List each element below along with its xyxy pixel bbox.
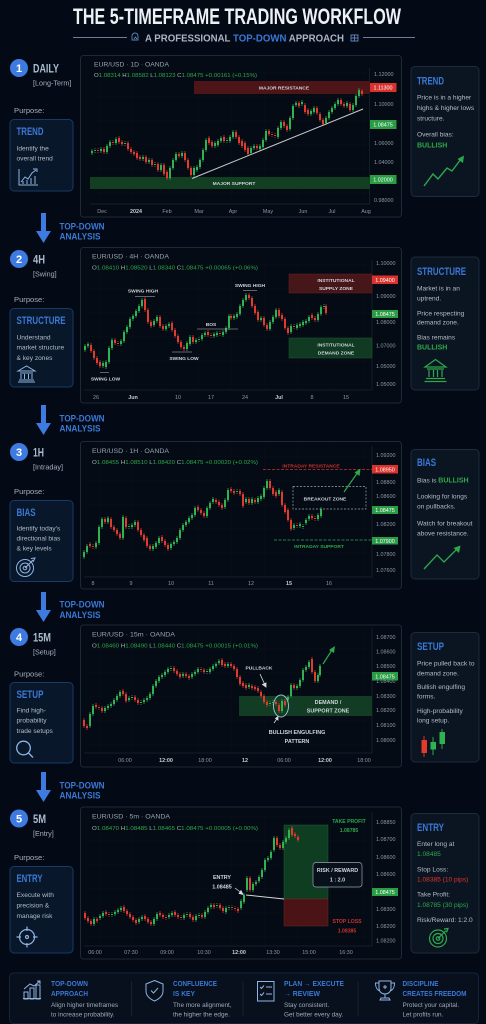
step 5 label: 5 bbox=[16, 814, 22, 826]
icon: checklist bbox=[258, 982, 274, 1001]
bullish engulfing annotation: PATTERN bbox=[285, 739, 309, 745]
chart header: EUR/USD · 1D · OANDA bbox=[94, 62, 170, 68]
step 1 label: 1 bbox=[16, 63, 22, 75]
step 2 label: Purpose: bbox=[14, 295, 44, 304]
side panel: entry: ENTRY bbox=[417, 822, 444, 834]
price axis: 1.08600 bbox=[376, 494, 396, 500]
intraday resistance bbox=[263, 464, 372, 470]
price axis: 1.04000 bbox=[374, 160, 394, 166]
date axis: 06:00 bbox=[88, 950, 102, 956]
arrow: top-down 4: ANALYSIS bbox=[60, 790, 100, 800]
takeaway: confluence: the higher the edge. bbox=[173, 1012, 230, 1018]
stop loss label bbox=[333, 919, 362, 934]
purpose card: entry bbox=[10, 866, 73, 953]
date axis bbox=[88, 950, 353, 956]
side panel: trend bbox=[411, 66, 479, 196]
demand zone: INSTITUTIONAL bbox=[317, 342, 355, 348]
date axis: 16 bbox=[326, 581, 332, 587]
price axis: 1.07000 bbox=[376, 344, 396, 350]
take profit label bbox=[332, 819, 367, 834]
step 5 label: Purpose: bbox=[14, 853, 44, 862]
takeaway: top-down approach: APPROACH bbox=[51, 989, 88, 998]
takeaway: confluence: IS KEY bbox=[173, 989, 195, 998]
step 3 label: Purpose: bbox=[14, 487, 44, 496]
swing labels: SWING HIGH bbox=[235, 283, 266, 289]
purpose card: structure bbox=[10, 308, 73, 387]
date axis: 8 bbox=[310, 395, 314, 401]
price axis: 1.08500 bbox=[376, 664, 396, 670]
price axis: 1.07900 bbox=[375, 539, 395, 545]
price axis: 1.08950 bbox=[375, 468, 395, 474]
chart header: EUR/USD · 5m · OANDA bbox=[92, 814, 171, 820]
side panel: entry: 1.08785 (30 pips) bbox=[417, 902, 468, 909]
chart 2: 4h bbox=[80, 248, 402, 403]
arrow: top-down 2 bbox=[36, 405, 104, 435]
price axis: 1.10000 bbox=[374, 102, 394, 108]
side panel: entry: 1.08485 bbox=[417, 851, 441, 858]
date axis: 10 bbox=[175, 395, 181, 401]
purpose card: trend: overall trend bbox=[16, 156, 53, 162]
entry annotation bbox=[212, 875, 284, 899]
side panel: structure bbox=[411, 257, 479, 390]
bullish engulfing annotation: BULLISH ENGULFING bbox=[269, 730, 325, 736]
step 4 label: Purpose: bbox=[14, 670, 44, 678]
arrow: top-down 3: ANALYSIS bbox=[60, 610, 100, 620]
date axis: 11 bbox=[208, 581, 214, 587]
date axis: Jun bbox=[128, 395, 138, 401]
step 4 label: 4 bbox=[16, 632, 23, 644]
risk reward box: RISK / REWARD bbox=[317, 868, 358, 874]
date axis: 06:00 bbox=[118, 758, 132, 764]
chart 3: 1h bbox=[80, 442, 402, 589]
date axis: 06:00 bbox=[277, 758, 291, 764]
takeaway: confluence: CONFLUENCE bbox=[173, 979, 217, 988]
step 3 label: 3 bbox=[16, 447, 22, 459]
trendline bbox=[192, 109, 363, 178]
pullback annotation bbox=[246, 666, 273, 687]
date axis: 24 bbox=[242, 395, 248, 401]
purpose card: entry: precision & bbox=[16, 902, 50, 910]
subtitle text: A PROFESSIONAL TOP-DOWN APPROACH bbox=[145, 32, 344, 44]
date axis: Jul bbox=[329, 209, 335, 215]
date axis: 15 bbox=[286, 581, 292, 587]
side panel: bias: Watch for breakout bbox=[417, 520, 473, 528]
step 2 label bbox=[10, 250, 57, 304]
demand zone: DEMAND ZONE bbox=[318, 350, 355, 356]
date axis: 13:30 bbox=[266, 950, 280, 956]
arrow: top-down 4 bbox=[36, 772, 104, 802]
side panel: structure: Price respecting bbox=[417, 310, 465, 318]
takeaway: discipline: Let profits run. bbox=[402, 1012, 444, 1018]
arrow: top-down 3: TOP-DOWN bbox=[60, 600, 104, 610]
icon: shield bbox=[146, 980, 163, 1001]
side panel: bias: on pullbacks. bbox=[417, 504, 456, 510]
date axis: Dec bbox=[97, 209, 107, 215]
side panel: trend: highs & higher lows bbox=[417, 105, 475, 112]
swing labels: SWING HIGH bbox=[128, 288, 159, 294]
purpose card: bias bbox=[10, 500, 73, 582]
step 5 label bbox=[10, 810, 54, 862]
icon: crosshair bbox=[16, 926, 38, 948]
purpose card: setup bbox=[10, 682, 73, 763]
takeaway: top-down approach: TOP-DOWN bbox=[51, 979, 88, 988]
major resistance zone bbox=[194, 81, 370, 94]
date axis: 12 bbox=[242, 758, 248, 764]
supply zone bbox=[289, 274, 372, 293]
takeaway: plan execute review bbox=[258, 979, 344, 1018]
side panel: trend: TREND bbox=[417, 76, 444, 88]
purpose card: setup: SETUP bbox=[16, 689, 44, 701]
date axis: 17 bbox=[208, 395, 214, 401]
side panel: setup: Price pulled back to bbox=[417, 660, 475, 668]
pullback annotation: PULLBACK bbox=[246, 666, 273, 672]
side panel: entry bbox=[411, 814, 479, 953]
step 4 label: [Setup] bbox=[33, 648, 56, 656]
price axis: 1.08475 bbox=[375, 674, 395, 680]
arrow: breakout bbox=[344, 468, 360, 492]
candlesticks bbox=[85, 293, 326, 369]
price axis: 1.08475 bbox=[375, 312, 395, 318]
date axis: 09:00 bbox=[160, 950, 174, 956]
purpose card: structure: STRUCTURE bbox=[16, 315, 66, 327]
bullish engulfing annotation bbox=[269, 695, 325, 745]
step 2 label: [Swing] bbox=[33, 270, 57, 278]
candlesticks bbox=[84, 657, 320, 730]
take profit zone bbox=[284, 825, 328, 899]
step 4 label bbox=[10, 628, 56, 678]
stop loss label: STOP LOSS bbox=[333, 919, 362, 925]
purpose card: setup: Find high- bbox=[16, 708, 46, 714]
side panel: setup bbox=[411, 632, 479, 762]
candlesticks bbox=[92, 88, 362, 180]
price axis: 1.02000 bbox=[373, 178, 393, 184]
price axis bbox=[372, 453, 398, 574]
price axis bbox=[372, 635, 398, 744]
ohlc values: O1.08470 H1.08485 L1.08465 C1.08475 +0.00005 (+0.00%) bbox=[92, 826, 258, 832]
side panel: setup: High-probability bbox=[417, 708, 464, 715]
swing labels: SWING LOW bbox=[169, 356, 199, 362]
step 5 label: 5M bbox=[33, 812, 46, 826]
date axis: Aug bbox=[361, 209, 371, 215]
icon: magnifier bbox=[17, 741, 33, 758]
step 1 label: DAILY bbox=[33, 62, 59, 76]
date axis: Apr bbox=[229, 209, 237, 215]
step 2 label: 4H bbox=[33, 252, 45, 266]
icon: rising arrow bbox=[424, 156, 464, 186]
major resistance zone: MAJOR RESISTANCE bbox=[259, 86, 310, 92]
side panel: setup: Bullish engulfing bbox=[417, 684, 465, 691]
date axis: May bbox=[263, 209, 273, 215]
stop loss label: 1.08385 bbox=[338, 928, 356, 934]
price axis bbox=[372, 820, 398, 944]
side panel: trend: Price is in a higher bbox=[417, 94, 472, 102]
price axis: 1.05000 bbox=[376, 364, 396, 370]
purpose card: trend bbox=[10, 120, 73, 191]
purpose card: structure: & key zones bbox=[16, 355, 53, 362]
price axis: 1.09400 bbox=[375, 278, 395, 284]
price axis: 1.08300 bbox=[376, 907, 396, 913]
demand support zone bbox=[239, 696, 372, 716]
date axis: 8 bbox=[92, 581, 94, 587]
side panel: bias: above resistance. bbox=[417, 530, 469, 538]
demand zone bbox=[289, 338, 372, 358]
risk reward box bbox=[313, 862, 362, 887]
price axis: 1.08600 bbox=[376, 855, 396, 861]
risk reward box: 1 : 2.0 bbox=[330, 878, 345, 884]
swing labels: SWING LOW bbox=[91, 376, 121, 382]
price axis: 1.08000 bbox=[376, 320, 396, 326]
price axis: 1.08400 bbox=[376, 679, 396, 685]
price axis: 1.08850 bbox=[376, 820, 396, 826]
price axis: 1.12000 bbox=[374, 72, 394, 78]
date axis: 12 bbox=[248, 581, 254, 587]
takeaway: plan execute review: → REVIEW bbox=[284, 989, 321, 998]
side panel: setup: long setup. bbox=[417, 718, 449, 724]
step 4 label: 15M bbox=[33, 630, 51, 644]
takeaway: top-down approach: Align higher timeframes bbox=[51, 1002, 118, 1009]
price axis: 1.08300 bbox=[376, 694, 396, 700]
side panel: trend: Overall bias: bbox=[417, 132, 454, 138]
arrow: top-down 1: ANALYSIS bbox=[60, 232, 100, 242]
icon: trend chart bbox=[19, 169, 38, 185]
icon: target bbox=[16, 558, 35, 576]
price axis: 1.08000 bbox=[376, 738, 396, 744]
date axis: 2024 bbox=[130, 209, 142, 215]
step 1 label: [Long-Term] bbox=[33, 78, 71, 88]
date axis bbox=[118, 758, 371, 764]
takeaway: top-down approach bbox=[23, 979, 118, 1018]
purpose card: entry: Execute with bbox=[16, 892, 54, 899]
date axis bbox=[93, 395, 349, 401]
bottom strip bbox=[10, 973, 478, 1024]
date axis: 10 bbox=[168, 581, 174, 587]
price axis: 1.11300 bbox=[373, 86, 393, 92]
date axis: 18:00 bbox=[357, 758, 371, 764]
purpose card: trend: Identify the bbox=[16, 146, 49, 152]
arrow: top-down 1: TOP-DOWN bbox=[60, 222, 104, 232]
arrow: top-down 2: ANALYSIS bbox=[60, 424, 100, 434]
price axis: 1.08200 bbox=[376, 708, 396, 714]
date axis: 16:30 bbox=[339, 950, 353, 956]
chart 5: 5m bbox=[80, 807, 402, 959]
price axis: 1.10000 bbox=[376, 261, 396, 267]
purpose card: bias: BIAS bbox=[16, 507, 36, 519]
side panel: setup: forms. bbox=[417, 694, 435, 700]
price axis: 1.09200 bbox=[376, 453, 396, 459]
intraday resistance: INTRADAY RESISTANCE bbox=[282, 464, 340, 470]
date axis: Feb bbox=[162, 209, 172, 215]
date axis: 15 bbox=[343, 395, 349, 401]
takeaway: confluence: The more alignment, bbox=[173, 1002, 232, 1009]
ohlc values: O1.08314 H1.08582 L1.08123 C1.08475 +0.00161 (+0.15%) bbox=[94, 73, 257, 79]
date axis bbox=[97, 209, 371, 215]
chart header: EUR/USD · 4H · OANDA bbox=[92, 254, 170, 260]
takeaway: discipline: DISCIPLINE bbox=[402, 979, 438, 988]
icon: target green bbox=[430, 928, 448, 947]
demand support zone: DEMAND / bbox=[315, 700, 342, 706]
side panel: entry: Take Profit: bbox=[417, 892, 450, 898]
step 1 label: Purpose: bbox=[14, 106, 44, 115]
arrow: top-down 2: TOP-DOWN bbox=[60, 414, 104, 424]
price axis: 1.07800 bbox=[376, 552, 396, 558]
date axis: 12:00 bbox=[159, 758, 173, 764]
purpose card: trend: TREND bbox=[16, 126, 44, 138]
candlesticks bbox=[85, 826, 298, 926]
date axis: 07:30 bbox=[124, 950, 138, 956]
price axis: 1.08475 bbox=[375, 508, 395, 514]
takeaway: top-down approach: to increase probability. bbox=[51, 1012, 115, 1018]
price axis: 1.08475 bbox=[375, 890, 395, 896]
chart header: EUR/USD · 1H · OANDA bbox=[92, 448, 170, 455]
date axis bbox=[92, 581, 332, 587]
side panel: entry: Risk/Reward: 1:2.0 bbox=[417, 917, 473, 924]
date axis: 12:00 bbox=[318, 758, 332, 764]
date axis: 26 bbox=[93, 395, 99, 401]
price axis: 1.08600 bbox=[376, 872, 396, 878]
ohlc values: O1.08410 H1.08520 L1.08340 C1.08475 +0.00065 (+0.06%) bbox=[92, 266, 258, 272]
arrow: top-down 4: TOP-DOWN bbox=[60, 780, 104, 790]
price axis: 1.08800 bbox=[376, 480, 396, 486]
side panel: entry: Enter long at bbox=[417, 841, 455, 848]
date axis: 12:00 bbox=[232, 950, 246, 956]
side panel: structure: Bias remains bbox=[417, 334, 456, 342]
step 3 label: 1H bbox=[33, 446, 44, 460]
icon: trophy bbox=[376, 981, 394, 1000]
price axis bbox=[372, 261, 398, 388]
chart 4: 15m bbox=[80, 625, 402, 767]
side panel: bias bbox=[411, 450, 479, 579]
side panel: structure: BULLISH bbox=[417, 344, 447, 352]
ohlc values: O1.08460 H1.08490 L1.08440 C1.08475 +0.00015 (+0.01%) bbox=[92, 644, 258, 650]
arrow: top-down 1 bbox=[36, 213, 104, 243]
date axis: 10:30 bbox=[197, 950, 211, 956]
takeaway: plan execute review: Stay consistent. bbox=[284, 1002, 329, 1009]
icon: rising arrow bbox=[424, 546, 460, 569]
entry annotation: ENTRY bbox=[213, 875, 231, 881]
intraday support: INTRADAY SUPPORT bbox=[294, 544, 344, 550]
purpose card: structure: market structure bbox=[16, 344, 64, 352]
price axis: 1.06000 bbox=[374, 141, 394, 147]
demand support zone: SUPPORT ZONE bbox=[307, 708, 350, 714]
purpose card: setup: trade setups bbox=[16, 728, 53, 735]
swing labels: BOS bbox=[206, 322, 217, 328]
takeaway: plan execute review: Get better every day. bbox=[284, 1012, 343, 1018]
side panel: entry: 1.08385 (10 pips) bbox=[417, 876, 468, 884]
side panel: trend: structure. bbox=[417, 116, 445, 122]
breakout zone bbox=[293, 486, 366, 509]
takeaway: discipline: CREATES FREEDOM bbox=[402, 989, 466, 998]
icon: candlesticks bbox=[422, 729, 445, 757]
purpose card: structure: Understand bbox=[16, 334, 51, 342]
step 2 label: 2 bbox=[16, 254, 22, 266]
takeaway: discipline bbox=[376, 979, 466, 1018]
candlesticks bbox=[84, 479, 321, 559]
price axis: 1.08200 bbox=[376, 924, 396, 930]
take profit label: TAKE PROFIT bbox=[332, 819, 367, 825]
price axis: 1.05000 bbox=[376, 382, 396, 388]
swing labels bbox=[91, 283, 266, 382]
date axis: 15:00 bbox=[302, 950, 316, 956]
breakout zone: BREAKOUT ZONE bbox=[304, 496, 347, 502]
price axis: 1.07600 bbox=[376, 568, 396, 574]
price axis: 1.08700 bbox=[376, 635, 396, 641]
intraday support bbox=[274, 540, 372, 550]
icon: bank green bbox=[424, 360, 446, 382]
ohlc values: O1.08455 H1.08510 L1.08420 C1.08475 +0.00020 (+0.02%) bbox=[92, 460, 258, 466]
price axis: 1.09000 bbox=[376, 294, 396, 300]
side panel: structure: Market is in an bbox=[417, 286, 460, 292]
side panel: bias: BIAS bbox=[417, 457, 436, 469]
chart header: EUR/USD · 15m · OANDA bbox=[92, 632, 176, 638]
step 3 label: [Intraday] bbox=[33, 462, 63, 472]
side panel: structure: demand zone. bbox=[417, 320, 459, 326]
purpose card: entry: ENTRY bbox=[16, 873, 43, 885]
arrow: top-down 3 bbox=[36, 592, 104, 622]
step 1 label bbox=[10, 59, 71, 115]
takeaway: plan execute review: PLAN → EXECUTE bbox=[284, 979, 344, 988]
side panel: setup: demand zone. bbox=[417, 670, 459, 678]
side panel: structure: STRUCTURE bbox=[417, 266, 466, 278]
price axis: 1.08700 bbox=[376, 837, 396, 843]
supply zone: INSTITUTIONAL bbox=[317, 278, 355, 284]
price axis: 1.08100 bbox=[376, 723, 396, 729]
side panel: setup: SETUP bbox=[417, 641, 444, 653]
side panel: bias: Bias is BULLISH bbox=[417, 478, 469, 484]
side panel: trend: BULLISH bbox=[417, 142, 447, 150]
takeaway: confluence bbox=[146, 979, 232, 1018]
purpose card: entry: manage risk bbox=[16, 913, 53, 920]
take profit label: 1.08785 bbox=[340, 828, 358, 834]
icon: bars and arrow bbox=[23, 981, 41, 999]
price axis bbox=[370, 72, 396, 204]
chart 1: daily bbox=[80, 56, 402, 217]
price axis: 1.08200 bbox=[376, 938, 396, 944]
date axis: Mar bbox=[194, 209, 204, 215]
price axis: 1.08475 bbox=[373, 122, 393, 128]
price axis: 1.08200 bbox=[376, 522, 396, 528]
icon: subtitle right bbox=[351, 35, 358, 41]
step 3 label bbox=[10, 443, 63, 496]
arrow: setup continuation bbox=[323, 646, 335, 664]
side panel: entry: Stop Loss: bbox=[417, 866, 448, 874]
entry annotation: 1.08485 bbox=[212, 884, 232, 890]
side panel: structure: uptrend. bbox=[417, 296, 441, 302]
icon: bank bbox=[18, 366, 35, 382]
price axis: 1.08600 bbox=[376, 650, 396, 656]
price axis: 0.98000 bbox=[374, 198, 394, 204]
purpose card: setup: probability bbox=[16, 718, 47, 724]
date axis: 18:00 bbox=[198, 758, 212, 764]
stop loss zone bbox=[284, 899, 328, 926]
icon: subtitle left bbox=[132, 33, 138, 40]
side panel: bias: Looking for longs bbox=[417, 494, 468, 500]
date axis: 9 bbox=[130, 581, 132, 587]
step 5 label: [Entry] bbox=[33, 829, 54, 838]
purpose card: bias: directional bias bbox=[16, 536, 61, 542]
major support zone bbox=[90, 177, 370, 189]
date axis: Jun bbox=[299, 209, 307, 215]
subtitle bbox=[73, 32, 415, 44]
supply zone: SUPPLY ZONE bbox=[319, 286, 354, 292]
purpose card: bias: Identify today's bbox=[16, 526, 61, 532]
major support zone: MAJOR SUPPORT bbox=[213, 181, 255, 187]
takeaway: discipline: Protect your capital. bbox=[402, 1002, 459, 1009]
date axis: Jul bbox=[275, 395, 283, 401]
purpose card: bias: & key levels bbox=[16, 546, 52, 552]
